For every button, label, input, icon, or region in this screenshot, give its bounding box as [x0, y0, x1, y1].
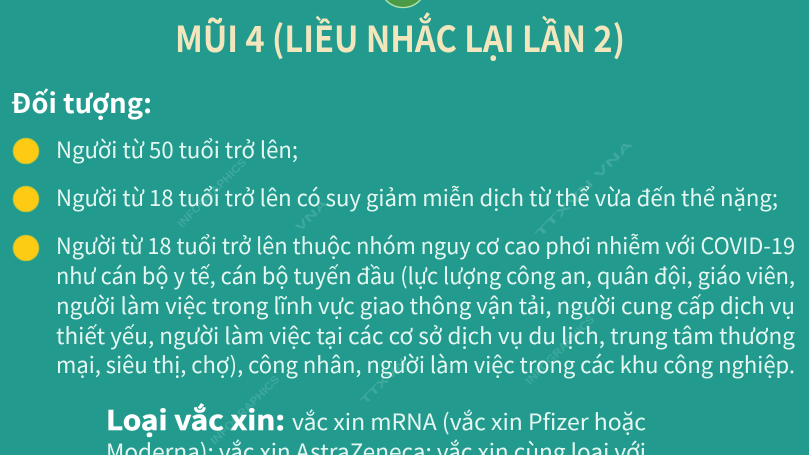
- heading: target group: Đối tượng:: [11, 82, 152, 121]
- list: target groups: [13, 133, 795, 380]
- bullet 3: mại, siêu thị, chợ), công nhân, người làm việc trong các khu công nghiệp.: [56, 348, 795, 380]
- text: INFOGRAPHICS: [209, 374, 282, 447]
- bullet 3: người làm việc trong lĩnh vực giao thông vận tải, người cung cấp dịch vụ: [56, 289, 795, 321]
- bullet 3: như cán bộ y tế, cán bộ tuyến đầu (lực lượng công an, quân đội, giáo viên,: [56, 259, 795, 291]
- text: TTXVN: [359, 356, 410, 407]
- title: MŨI 4 (LIỀU NHẮC LẠI LẦN 2): [175, 11, 625, 63]
- text: TTXVN VNA: [534, 138, 636, 240]
- text: VNA: [294, 197, 330, 234]
- vaccine type text block: Loại vắc xin:: [106, 399, 285, 438]
- vaccine type text block: vắc xin mRNA (vắc xin Pfizer hoặc: [292, 405, 646, 437]
- text: INFOGRAPHICS: [176, 157, 249, 230]
- icon: green circle badge: [380, 0, 426, 8]
- vaccine type text block: [106, 399, 646, 455]
- bullet 3: [13, 229, 795, 380]
- bullet 3: Người từ 18 tuổi trở lên thuộc nhóm nguy cơ cao phơi nhiễm với COVID-19: [56, 229, 795, 261]
- bullet 2: Người từ 18 tuổi trở lên có suy giảm miễn dịch từ thể vừa đến thể nặng;: [56, 181, 778, 213]
- bullet 3: thiết yếu, người làm việc tại các cơ sở dịch vụ du lịch, trung tâm thương: [56, 319, 795, 351]
- bullet 1: Người từ 50 tuổi trở lên;: [56, 133, 298, 165]
- text: INFOGRAPHICS: [524, 314, 597, 387]
